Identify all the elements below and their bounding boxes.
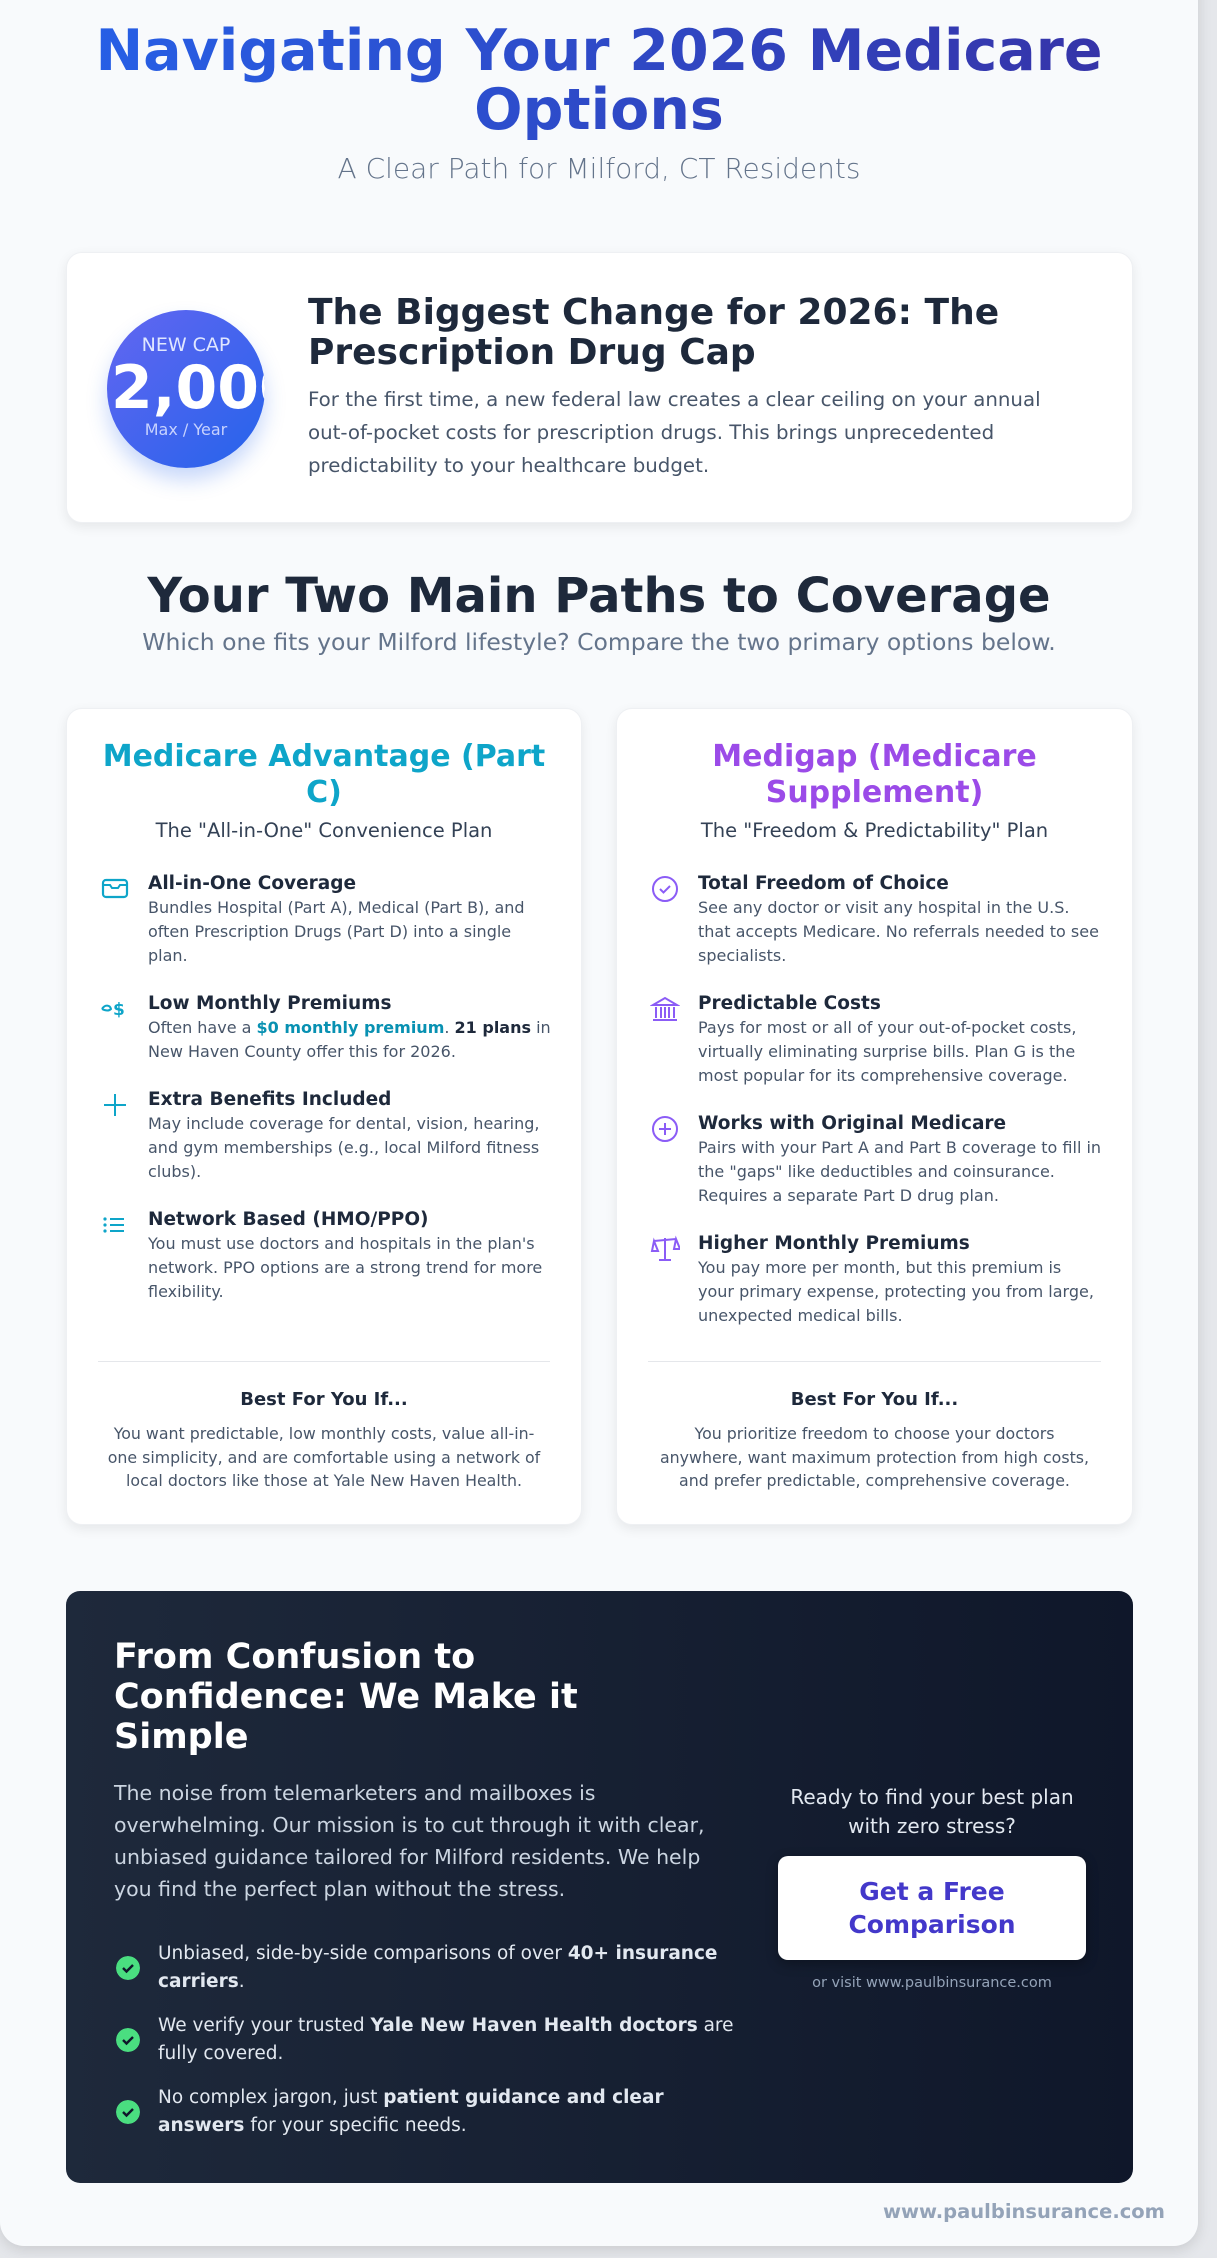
feature: low premiums	[101, 993, 551, 1061]
panel: medicare advantage: The "All-in-One" Convenience Plan	[156, 819, 492, 842]
cta text: The noise from telemarketers and mailboxes is overwhelming. Our mission is to cut through it with clear, unbiased guidance tailored for Milford residents. We help you find the perfect plan without the stress.	[114, 1781, 705, 1901]
best for: Best For You If...	[240, 1389, 408, 1410]
feature: higher premiums: Higher Monthly Premiums	[698, 1233, 970, 1254]
best for	[660, 1389, 1089, 1490]
text block: For the first time, a new federal law creates a clear ceiling on your annual out-of-pocket costs for prescription drugs. This brings unprecedented predictability to your healthcare budget.	[308, 388, 1041, 477]
title	[0, 22, 1198, 140]
panel: medicare advantage: Medicare Advantage (Part C)	[103, 739, 545, 810]
best for: You want predictable, low monthly costs, value all-in-one simplicity, and are comfortable using a network of local doctors like those at Yale New Haven Health.	[108, 1424, 540, 1490]
title: Options	[474, 77, 724, 143]
bullet 2: We verify your trusted Yale New Haven Health doctors are fully covered.	[158, 2015, 734, 2064]
feature: predictable	[650, 993, 1076, 1085]
feature: extra benefits: Extra Benefits Included	[148, 1089, 391, 1110]
icon: cap circle: Max / Year	[145, 420, 227, 439]
feature: predictable: Predictable Costs	[698, 993, 881, 1014]
icon: cap circle	[107, 310, 265, 468]
feature: extra benefits	[104, 1089, 540, 1181]
feature: network: You must use doctors and hospitals in the plan's network. PPO options are a strong trend for more flexibility.	[148, 1234, 542, 1301]
best for	[108, 1389, 540, 1490]
subheading: Which one fits your Milford lifestyle? Compare the two primary options below.	[142, 628, 1056, 656]
feature: extra benefits: May include coverage for dental, vision, hearing, and gym memberships (e.g., local Milford fitness clubs).	[148, 1114, 540, 1181]
cta prompt: Ready to find your best plan with zero stress?	[790, 1785, 1074, 1838]
bullet 3: No complex jargon, just patient guidance and clear answers for your specific needs.	[158, 2087, 664, 2136]
feature: all-in-one	[102, 873, 525, 965]
heading: The Biggest Change for 2026: The Prescription Drug Cap	[308, 292, 999, 373]
panel: medigap	[616, 708, 1133, 1525]
subtitle: A Clear Path for Milford, CT Residents	[338, 152, 860, 185]
best for: Best For You If...	[791, 1389, 958, 1410]
panel: medicare advantage	[66, 708, 582, 1525]
panel: cta	[66, 1591, 1133, 2183]
button: Get a Free	[859, 1877, 1005, 1906]
panel: prescription cap	[66, 252, 1133, 523]
feature: freedom: See any doctor or visit any hospital in the U.S. that accepts Medicare. No referrals needed to see specialists.	[698, 898, 1099, 965]
footer url: www.paulbinsurance.com	[883, 2200, 1165, 2223]
feature: original medicare: Works with Original Medicare	[698, 1113, 1006, 1134]
heading: two paths: Your Two Main Paths to Coverage	[147, 568, 1051, 624]
visit text: or visit www.paulbinsurance.com	[812, 1975, 1052, 1991]
feature: all-in-one: All-in-One Coverage	[148, 873, 356, 894]
bullet list	[116, 1943, 734, 2136]
feature: predictable: Pays for most or all of your out-of-pocket costs, virtually eliminating surprise bills. Plan G is the most popular for its comprehensive coverage.	[698, 1018, 1076, 1085]
icon: cap circle: NEW CAP	[142, 334, 230, 356]
feature: network	[103, 1209, 542, 1301]
panel: medicare advantage: $	[113, 1000, 125, 1020]
button	[778, 1856, 1086, 1960]
title: Navigating Your 2026 Medicare	[95, 18, 1103, 84]
feature: original medicare	[652, 1113, 1101, 1205]
panel: medigap: The "Freedom & Predictability" Plan	[701, 819, 1048, 842]
feature: low premiums: Low Monthly Premiums	[148, 993, 391, 1014]
button: Comparison	[848, 1910, 1016, 1939]
feature: all-in-one: Bundles Hospital (Part A), Medical (Part B), and often Prescription Drugs (Part D) into a single plan.	[148, 898, 525, 965]
feature: network: Network Based (HMO/PPO)	[148, 1209, 428, 1230]
panel: medigap: Medigap (Medicare Supplement)	[712, 739, 1037, 810]
bullet 1: Unbiased, side-by-side comparisons of over 40+ insurance carriers.	[158, 1943, 717, 1992]
feature: original medicare: Pairs with your Part A and Part B coverage to fill in the "gaps" like deductibles and coinsurance. Requires a separate Part D drug plan.	[698, 1138, 1101, 1205]
feature: freedom: Total Freedom of Choice	[698, 873, 949, 894]
best for: You prioritize freedom to choose your doctors anywhere, want maximum protection from high costs, and prefer predictable, comprehensive coverage.	[660, 1424, 1089, 1490]
feature: freedom	[652, 873, 1099, 965]
feature: low premiums: Often have a $0 monthly premium. 21 plans in New Haven County offer this for 2026.	[148, 1018, 551, 1061]
feature: higher premiums	[650, 1233, 1094, 1325]
feature: higher premiums: You pay more per month, but this premium is your primary expense, protecting you from large, unexpected medical bills.	[698, 1258, 1094, 1325]
cta heading: From Confusion to Confidence: We Make it Simple	[114, 1637, 578, 1757]
